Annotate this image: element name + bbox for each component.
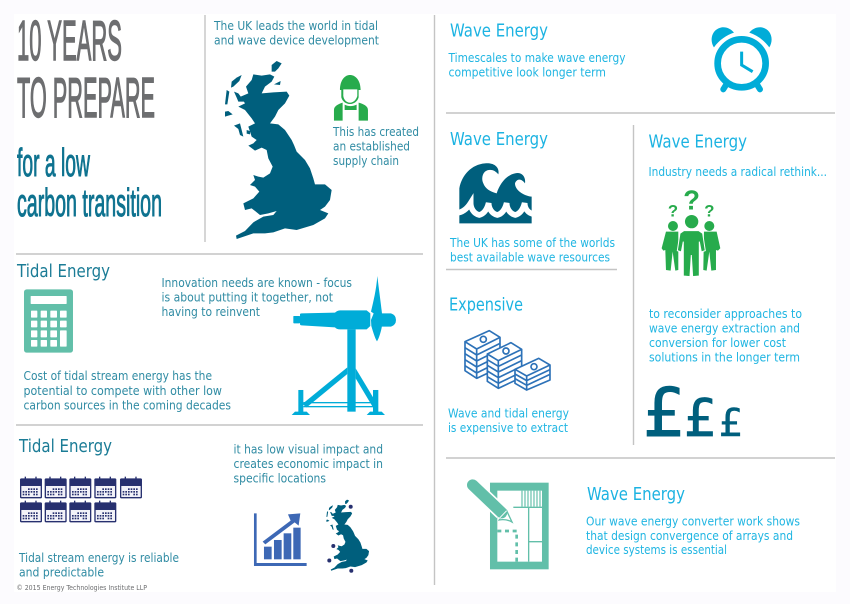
text: reliable <box>18 551 179 580</box>
title: for a low <box>17 142 90 185</box>
infographic: TO PREPARE <box>17 66 155 130</box>
text: wave resources: The UK has some of the worlds <box>449 236 615 250</box>
icon: pound signs <box>643 374 743 452</box>
icon: pound signs: £ <box>684 389 717 449</box>
text: reliable: Tidal stream energy is reliable <box>18 551 179 565</box>
text: supply chain <box>332 125 419 168</box>
panel: wave energy converter <box>473 483 800 569</box>
icon: people with questions <box>662 184 720 277</box>
panel: wave energy timescales <box>448 22 772 89</box>
panel: tidal energy cost <box>16 262 396 415</box>
heading: Wave Energy <box>450 22 548 42</box>
copyright: © 2015 Energy Technologies Institute LLP <box>16 584 147 592</box>
panel: radical rethink <box>643 132 827 452</box>
text: expensive: Wave and tidal energy <box>448 407 569 421</box>
text: converter work: that design convergence of arrays and <box>586 529 793 543</box>
text: reconsider: solutions in the longer term <box>649 350 800 364</box>
icon: floor plan and pencil <box>473 483 549 569</box>
heading: Wave Energy <box>648 132 747 152</box>
title: 10 YEARS <box>17 9 122 73</box>
text: low visual impact <box>234 442 383 486</box>
text: converter work <box>586 514 800 557</box>
text: reconsider: conversion for lower cost <box>649 336 786 350</box>
text: expensive <box>448 407 569 435</box>
text: low visual impact: specific locations <box>234 472 326 486</box>
text: supply chain: an established <box>333 140 410 154</box>
text: wave resources <box>449 236 615 264</box>
heading: Tidal Energy <box>16 262 110 282</box>
text: low visual impact: creates economic impact in <box>234 457 383 471</box>
icon: growth chart <box>254 513 307 566</box>
text: reliable: and predictable <box>19 566 104 580</box>
icon: money stacks <box>465 331 550 390</box>
text: UK leads <box>213 19 379 48</box>
text: reconsider: to reconsider approaches to <box>649 307 802 321</box>
icon: pound signs: £ <box>643 374 686 452</box>
text: low visual impact: it has low visual impact and <box>234 442 383 456</box>
text: UK leads: The UK leads the world in tidal <box>213 19 378 33</box>
map: UK with tidal sites <box>326 500 369 573</box>
text: converter work: Our wave energy converter work shows <box>586 514 800 528</box>
text: expensive: is expensive to extract <box>448 421 568 435</box>
text: supply chain: supply chain <box>333 154 399 168</box>
icon: people with questions: ? <box>704 202 714 221</box>
text: tidal cost: potential to compete with other low <box>24 384 222 398</box>
title <box>17 9 162 225</box>
map: United Kingdom <box>225 61 332 239</box>
text: innovation: is about putting it together, not <box>162 291 333 305</box>
panel: expensive <box>448 296 569 435</box>
icon: calendars <box>20 477 142 522</box>
icon: calculator <box>24 289 73 353</box>
icon: tidal turbine <box>292 276 396 415</box>
text: reconsider: wave energy extraction and <box>649 322 800 336</box>
text: innovation: having to reinvent <box>162 305 260 319</box>
text: supply chain: This has created <box>332 125 419 139</box>
icon: pound signs: £ <box>719 401 743 445</box>
text: wave resources: best available wave resources <box>450 250 610 264</box>
icon: people with questions: ? <box>683 184 700 215</box>
panel: wave resources <box>449 130 615 264</box>
icon: waves <box>457 163 535 223</box>
icon: worker with helmet <box>334 75 368 121</box>
heading: Wave Energy <box>450 130 548 150</box>
panel: UK device development <box>213 19 419 239</box>
panel: tidal energy reliable <box>18 437 383 580</box>
text: converter work: device systems is essential <box>586 543 727 557</box>
text: timescales: competitive look longer term <box>448 66 606 80</box>
text: timescales: Timescales to make wave energy <box>448 51 626 65</box>
text: UK leads: and wave device development <box>214 34 379 48</box>
text: reconsider <box>649 307 802 364</box>
text: tidal cost: carbon sources in the coming decades <box>24 398 231 412</box>
text: tidal cost <box>24 369 231 412</box>
icon: people with questions: ? <box>668 202 678 221</box>
heading: Expensive <box>449 296 523 316</box>
heading: Tidal Energy <box>18 437 112 457</box>
text: innovation <box>162 276 352 319</box>
heading: Wave Energy <box>587 485 685 505</box>
title: carbon transition <box>17 182 162 225</box>
text: innovation: Innovation needs are known - focus <box>162 276 352 290</box>
icon: alarm clock <box>712 27 772 89</box>
text: tidal cost: Cost of tidal stream energy has the <box>24 369 212 383</box>
text: timescales <box>448 51 626 80</box>
text: rethink: Industry needs a radical rethink... <box>648 165 827 179</box>
